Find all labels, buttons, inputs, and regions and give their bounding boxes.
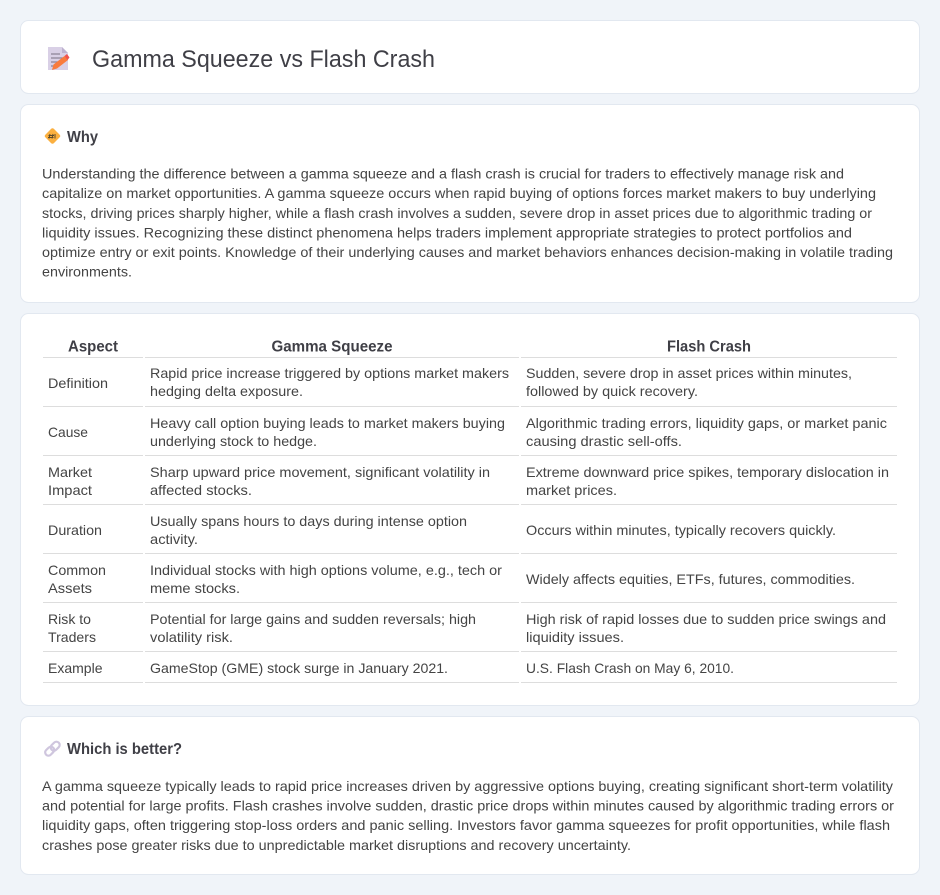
table row: market impact: market prices.	[526, 482, 617, 498]
table row: market impact	[43, 464, 897, 505]
text block: why paragraph: optimize entry or exit points. Knowledge of their underlying causes and market behaviors enhances decision-making in volatile trading	[42, 244, 893, 260]
icon: chain link	[44, 740, 61, 757]
table row: example: Example	[48, 660, 103, 676]
icon: warning diamond	[44, 128, 61, 144]
table row: risk to traders: Traders	[48, 629, 96, 645]
table row: common assets	[43, 562, 897, 603]
heading: which is better: Which is better?	[67, 741, 182, 758]
table header row: Aspect	[68, 338, 119, 356]
table row: cause: Cause	[48, 424, 88, 440]
text block: why paragraph	[42, 166, 893, 280]
table row: definition: hedging delta exposure.	[150, 383, 303, 399]
table row: risk to traders: High risk of rapid losses due to sudden price swings and	[526, 611, 886, 627]
table row: duration	[43, 513, 897, 554]
table row: risk to traders	[43, 611, 897, 652]
panel: comparison table	[20, 314, 920, 706]
table row: common assets: Individual stocks with high options volume, e.g., tech or	[150, 562, 502, 578]
table row: cause: causing drastic sell-offs.	[526, 433, 682, 449]
panel: header	[20, 20, 920, 94]
table row: risk to traders: Risk to	[48, 611, 91, 627]
table row: definition	[43, 365, 897, 407]
table row: example: GameStop (GME) stock surge in January 2021.	[150, 660, 448, 676]
table row: cause: underlying stock to hedge.	[150, 433, 317, 449]
table row: definition: Definition	[48, 375, 108, 391]
table row: cause: Algorithmic trading errors, liquidity gaps, or market panic	[526, 415, 887, 431]
table row: risk to traders: volatility risk.	[150, 629, 233, 645]
icon: memo and pencil	[48, 47, 70, 70]
table row: definition: Rapid price increase triggered by options market makers	[150, 365, 509, 381]
table row: risk to traders: liquidity issues.	[526, 629, 624, 645]
table header row: Flash Crash	[667, 338, 751, 356]
table row: market impact: affected stocks.	[150, 482, 252, 498]
text block: which is better paragraph: A gamma squeeze typically leads to rapid price increases driven by aggressive options buying, creating significant short-term volatility	[42, 778, 893, 794]
table row: market impact: Sharp upward price movement, significant volatility in	[150, 464, 490, 480]
table row: common assets: Widely affects equities, ETFs, futures, commodities.	[526, 571, 855, 587]
table row: example	[43, 660, 897, 683]
table row: risk to traders: Potential for large gains and sudden reversals; high	[150, 611, 476, 627]
table row: definition: Sudden, severe drop in asset prices within minutes,	[526, 365, 852, 381]
text block: why paragraph: stocks, driving prices sharply higher, while a flash crash involves a sudden, severe drop in asset prices due to algorithmic trading or	[42, 205, 872, 221]
table row: common assets: Assets	[48, 580, 92, 596]
table row: duration: Occurs within minutes, typically recovers quickly.	[526, 522, 836, 538]
panel: why	[20, 104, 920, 302]
table row: duration: Usually spans hours to days during intense option	[150, 513, 467, 529]
heading: why: Why	[67, 129, 98, 146]
panel: which is better	[20, 716, 920, 874]
title: Gamma Squeeze vs Flash Crash	[92, 46, 435, 73]
table row: duration: Duration	[48, 522, 102, 538]
table row: definition: followed by quick recovery.	[526, 383, 698, 399]
text block: why paragraph: environments.	[42, 264, 132, 280]
text block: which is better paragraph: liquidity gaps, often triggering stop-loss orders and panic selling. Investors favor gamma squeezes for profit opportunities, while flash	[42, 817, 890, 833]
table row: common assets: meme stocks.	[150, 580, 240, 596]
text block: why paragraph: Understanding the difference between a gamma squeeze and a flash crash is crucial for traders to effectively manage risk and	[42, 166, 844, 182]
table row: market impact: Impact	[48, 482, 92, 498]
table row: market impact: Extreme downward price spikes, temporary dislocation in	[526, 464, 889, 480]
table row: duration: activity.	[150, 531, 198, 547]
text block: why paragraph: capitalize on market opportunities. A gamma squeeze occurs when rapid buying of options forces market makers to buy underlying	[42, 185, 876, 201]
table row: cause	[43, 415, 897, 456]
table header row: Gamma Squeeze	[272, 338, 393, 356]
text block: why paragraph: liquidity issues. Recognizing these distinct phenomena helps traders implement appropriate strategies to protect portfolios and	[42, 224, 852, 240]
table header row	[43, 338, 897, 358]
table row: example: U.S. Flash Crash on May 6, 2010.	[526, 660, 734, 676]
table row: market impact: Market	[48, 464, 92, 480]
text block: which is better paragraph: and potential for large profits. Flash crashes involve sudden, drastic price drops within minutes caused by algorithmic trading errors or	[42, 798, 894, 814]
table row: cause: Heavy call option buying leads to market makers buying	[150, 415, 505, 431]
text block: which is better paragraph: crashes pose greater risks due to unpredictable market disruptions and recovery uncertainty.	[42, 837, 631, 853]
table row: common assets: Common	[48, 562, 106, 578]
text block: which is better paragraph	[42, 778, 894, 853]
